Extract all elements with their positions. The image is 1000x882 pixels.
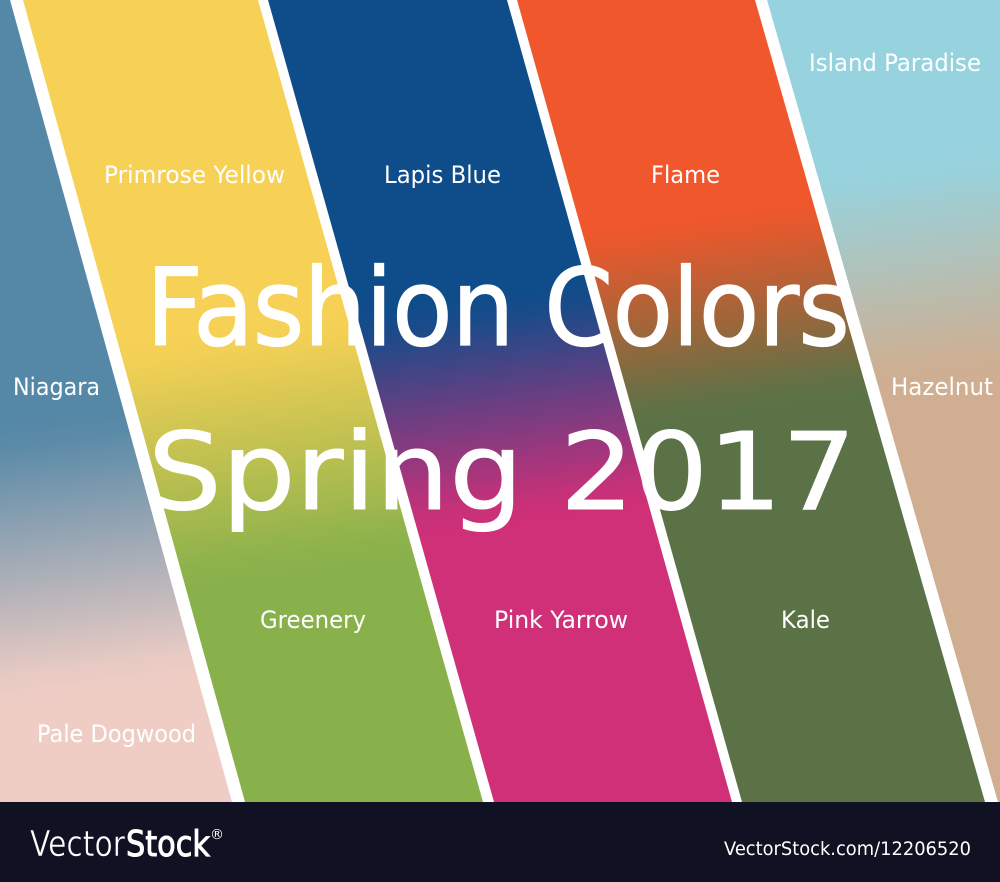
label: Lapis Blue: Lapis Blue (384, 161, 501, 189)
label: Island Paradise: Island Paradise (809, 49, 981, 77)
title: Spring 2017 (148, 411, 856, 535)
label: Hazelnut: Hazelnut (891, 373, 993, 401)
band: Niagara to Pale Dogwood (0, 0, 232, 802)
label: Primrose Yellow: Primrose Yellow (104, 161, 285, 189)
footer logo: Stock (126, 824, 210, 865)
band: Island Paradise to Hazelnut (767, 0, 1000, 802)
label: Kale: Kale (781, 606, 830, 634)
band: Primrose Yellow to Greenery (23, 0, 483, 802)
band: Lapis Blue to Pink Yarrow (268, 0, 732, 802)
footer image id: VectorStock.com/12206520 (724, 838, 971, 860)
footer bar (0, 802, 1000, 882)
footer logo: ® (210, 827, 224, 843)
footer logo: Vector (30, 824, 125, 865)
footer logo (30, 824, 224, 865)
label: Greenery: Greenery (260, 606, 366, 634)
title (146, 247, 856, 535)
band: Flame to Kale (517, 0, 985, 802)
label: Pale Dogwood: Pale Dogwood (37, 720, 196, 748)
title: Fashion Colors (146, 247, 849, 371)
label: Flame: Flame (651, 161, 720, 189)
label: Niagara: Niagara (13, 373, 100, 401)
label: Pink Yarrow: Pink Yarrow (494, 606, 628, 634)
